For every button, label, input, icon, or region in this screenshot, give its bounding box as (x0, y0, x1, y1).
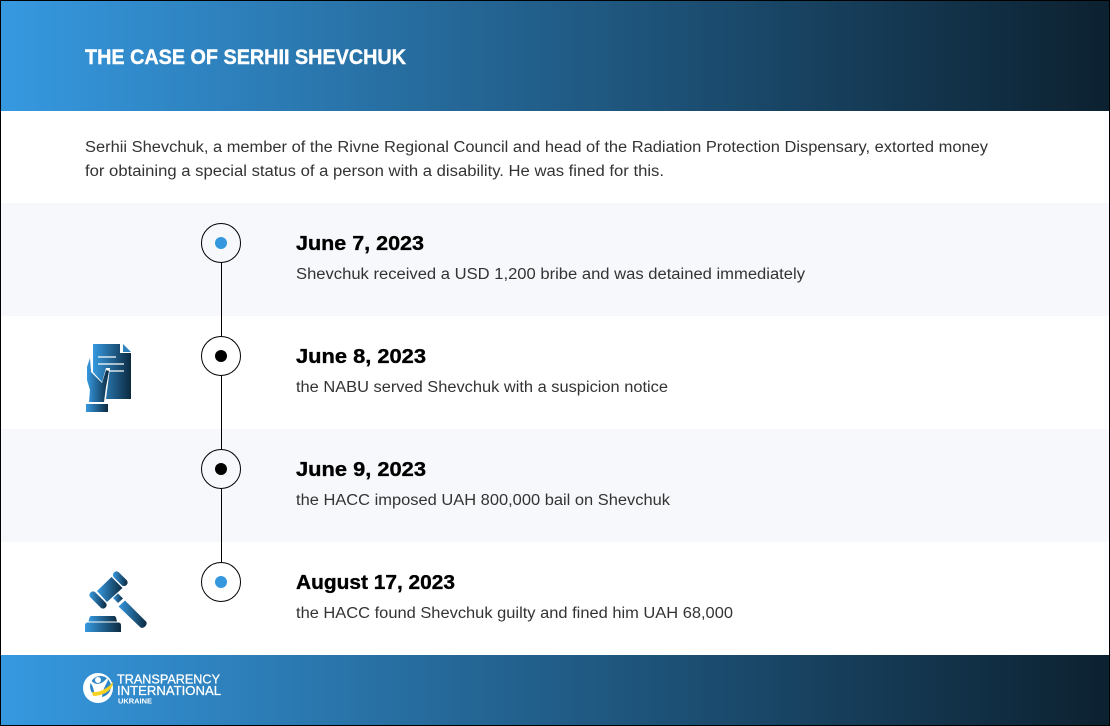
intro text (85, 139, 988, 180)
event: June 7: June 7, 2023 (296, 232, 424, 255)
icon: judge gavel (85, 571, 147, 632)
event: June 7: Shevchuk received a USD 1,200 bribe and was detained immediately (296, 266, 805, 283)
event: June 9: June 9, 2023 (296, 458, 426, 481)
event: August 17: the HACC found Shevchuk guilty and fined him UAH 68,000 (296, 605, 733, 622)
logo: Transparency International Ukraine: INTERNATIONAL (117, 684, 221, 698)
event: June 8: June 8, 2023 (296, 345, 426, 368)
event: June 9 (296, 458, 670, 509)
logo: Transparency International Ukraine (83, 672, 221, 706)
footer band (1, 655, 1109, 725)
icon: hand holding document (86, 344, 131, 412)
intro text: Serhii Shevchuk, a member of the Rivne Regional Council and head of the Radiation Protection Dispensary, extorted money (85, 139, 988, 156)
timeline marker: August 17 (202, 562, 240, 602)
logo: Transparency International Ukraine: TRANSPARENCY (117, 672, 221, 686)
event: June 8 (296, 345, 668, 396)
event: August 17 (296, 571, 733, 622)
row background: June 7 (1, 203, 1109, 316)
event: June 8: the NABU served Shevchuk with a suspicion notice (296, 379, 668, 396)
timeline marker: June 9 (202, 450, 240, 488)
timeline marker: June 8 (202, 336, 240, 376)
intro text: for obtaining a special status of a person with a disability. He was fined for this. (85, 163, 664, 180)
event: August 17: August 17, 2023 (296, 571, 455, 594)
title: THE CASE OF SERHII SHEVCHUK (85, 46, 406, 69)
timeline line (220, 262, 222, 563)
row background: June 9 (1, 429, 1109, 542)
logo: Transparency International Ukraine: UKRAINE (118, 698, 152, 706)
timeline marker: June 7 (202, 224, 240, 262)
event: June 7 (296, 232, 805, 283)
header band (1, 1, 1109, 111)
event: June 9: the HACC imposed UAH 800,000 bail on Shevchuk (296, 492, 670, 509)
